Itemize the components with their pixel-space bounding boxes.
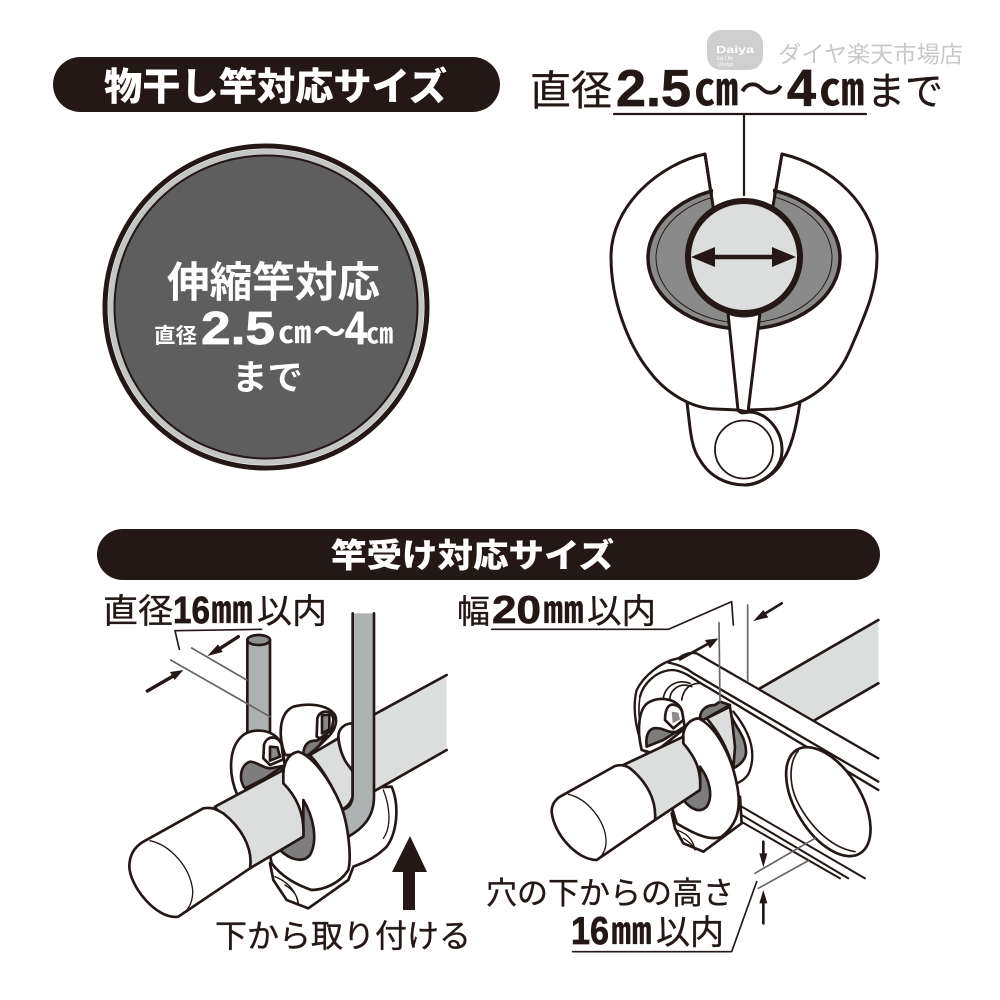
hex inner lines <box>677 830 695 850</box>
round badge: telescopic pole: まで <box>232 350 303 401</box>
illustration: mounted in slot <box>492 602 888 952</box>
round badge: telescopic pole: ㎝ <box>278 308 311 352</box>
front rod <box>215 770 303 868</box>
label: attach from below: 下から取り付ける <box>215 911 471 957</box>
grey disc <box>280 800 314 860</box>
back rod piece <box>707 707 738 768</box>
round badge: telescopic pole <box>105 146 427 468</box>
label: diameter 16mm <box>103 579 327 634</box>
watermark logo <box>707 30 763 70</box>
slot inner arcs <box>639 682 700 750</box>
round badge: telescopic pole: 伸縮竿対応 <box>167 249 380 310</box>
hex lower body <box>672 790 742 852</box>
lower ring <box>715 410 782 485</box>
oval hole <box>769 733 888 870</box>
clip body <box>611 154 877 410</box>
watermark shop name: ダイヤ楽天市場店 <box>778 35 963 69</box>
leader height <box>573 882 757 952</box>
end cap <box>129 808 251 917</box>
slot right edge <box>733 712 752 783</box>
round badge: telescopic pole: 直径 <box>154 320 197 350</box>
short pole <box>247 635 270 740</box>
illustration: mounted from below <box>129 613 447 917</box>
diameter size text: 2.5 <box>616 60 691 118</box>
clip lower lobe <box>687 402 800 485</box>
back tab <box>338 723 353 770</box>
pole cross-section <box>688 201 800 313</box>
diameter size text: まで <box>867 61 943 117</box>
clip tabs detail <box>231 705 353 809</box>
watermark logo: Joy Life <box>716 56 733 62</box>
back rod <box>760 620 878 720</box>
lower plate strip <box>738 807 865 878</box>
label: width 20mm: 以内 <box>587 584 656 633</box>
arrows 20mm <box>680 603 782 659</box>
label: 16mm within: 16 <box>571 910 609 953</box>
plate outlines <box>635 653 878 790</box>
label: 16mm within: 以内 <box>656 905 724 954</box>
label: width 20mm: ㎜ <box>543 579 584 634</box>
back body lobes <box>639 699 746 768</box>
diameter size text: ㎝ <box>694 53 738 119</box>
long rod right part <box>373 675 447 792</box>
end cap <box>552 765 655 860</box>
round badge: telescopic pole: 2.5 <box>201 302 275 354</box>
heading: laundry pole size: 物干し竿対応サイズ <box>104 56 447 111</box>
dark collar <box>648 187 840 329</box>
arrows height <box>759 842 767 923</box>
double arrow <box>691 247 796 267</box>
front ring <box>263 752 350 890</box>
label: width 20mm: 幅 <box>457 585 490 633</box>
diameter size text: 〜 <box>739 54 784 118</box>
arrow: upward <box>392 836 427 910</box>
label: diameter 16mm: 直径 <box>103 584 173 633</box>
watermark logo: Design <box>718 62 734 68</box>
label: diameter 16mm: ㎜ <box>211 579 253 634</box>
left tab <box>231 731 285 800</box>
label: 16mm within: ㎜ <box>611 900 652 955</box>
back lobe and lower hex <box>270 787 396 908</box>
leader 16mm <box>175 629 262 649</box>
diameter size text: 4 <box>787 60 816 118</box>
diameter size text: 直径 <box>530 57 612 117</box>
front rod <box>623 737 700 820</box>
right tab <box>700 702 730 720</box>
label: height from hole bottom: 穴の下からの高さ <box>486 868 734 913</box>
label: 16mm within <box>571 900 724 955</box>
label: diameter 16mm: 16 <box>173 590 210 632</box>
label: width 20mm: 20 <box>492 589 541 632</box>
watermark logo: Daiya <box>716 45 755 56</box>
grey disc <box>683 767 710 810</box>
lower wedge <box>728 313 760 412</box>
diameter size text: ㎝ <box>819 53 864 119</box>
label: diameter 16mm: 以内 <box>257 584 327 633</box>
round badge: telescopic pole: ㎝ <box>366 312 393 352</box>
diagram: pole clip front view <box>611 150 877 485</box>
round badge: telescopic pole: 〜 <box>313 307 346 353</box>
top notch cover <box>713 150 773 215</box>
arrows 16mm <box>147 637 238 691</box>
tall J hook <box>342 613 374 837</box>
right tab <box>281 705 336 755</box>
leader line: diameter <box>614 114 866 195</box>
diameter size text <box>530 53 943 119</box>
label: width 20mm <box>457 579 656 634</box>
heading: rod receiver size: 竿受け対応サイズ <box>331 529 614 577</box>
front ring <box>667 718 739 838</box>
left tab <box>639 699 685 753</box>
right grey strip <box>732 717 746 768</box>
heading: rod receiver size <box>97 529 880 580</box>
leader 20mm <box>492 602 733 629</box>
round badge: telescopic pole: 4 <box>345 302 367 354</box>
back rod middle <box>310 738 353 809</box>
